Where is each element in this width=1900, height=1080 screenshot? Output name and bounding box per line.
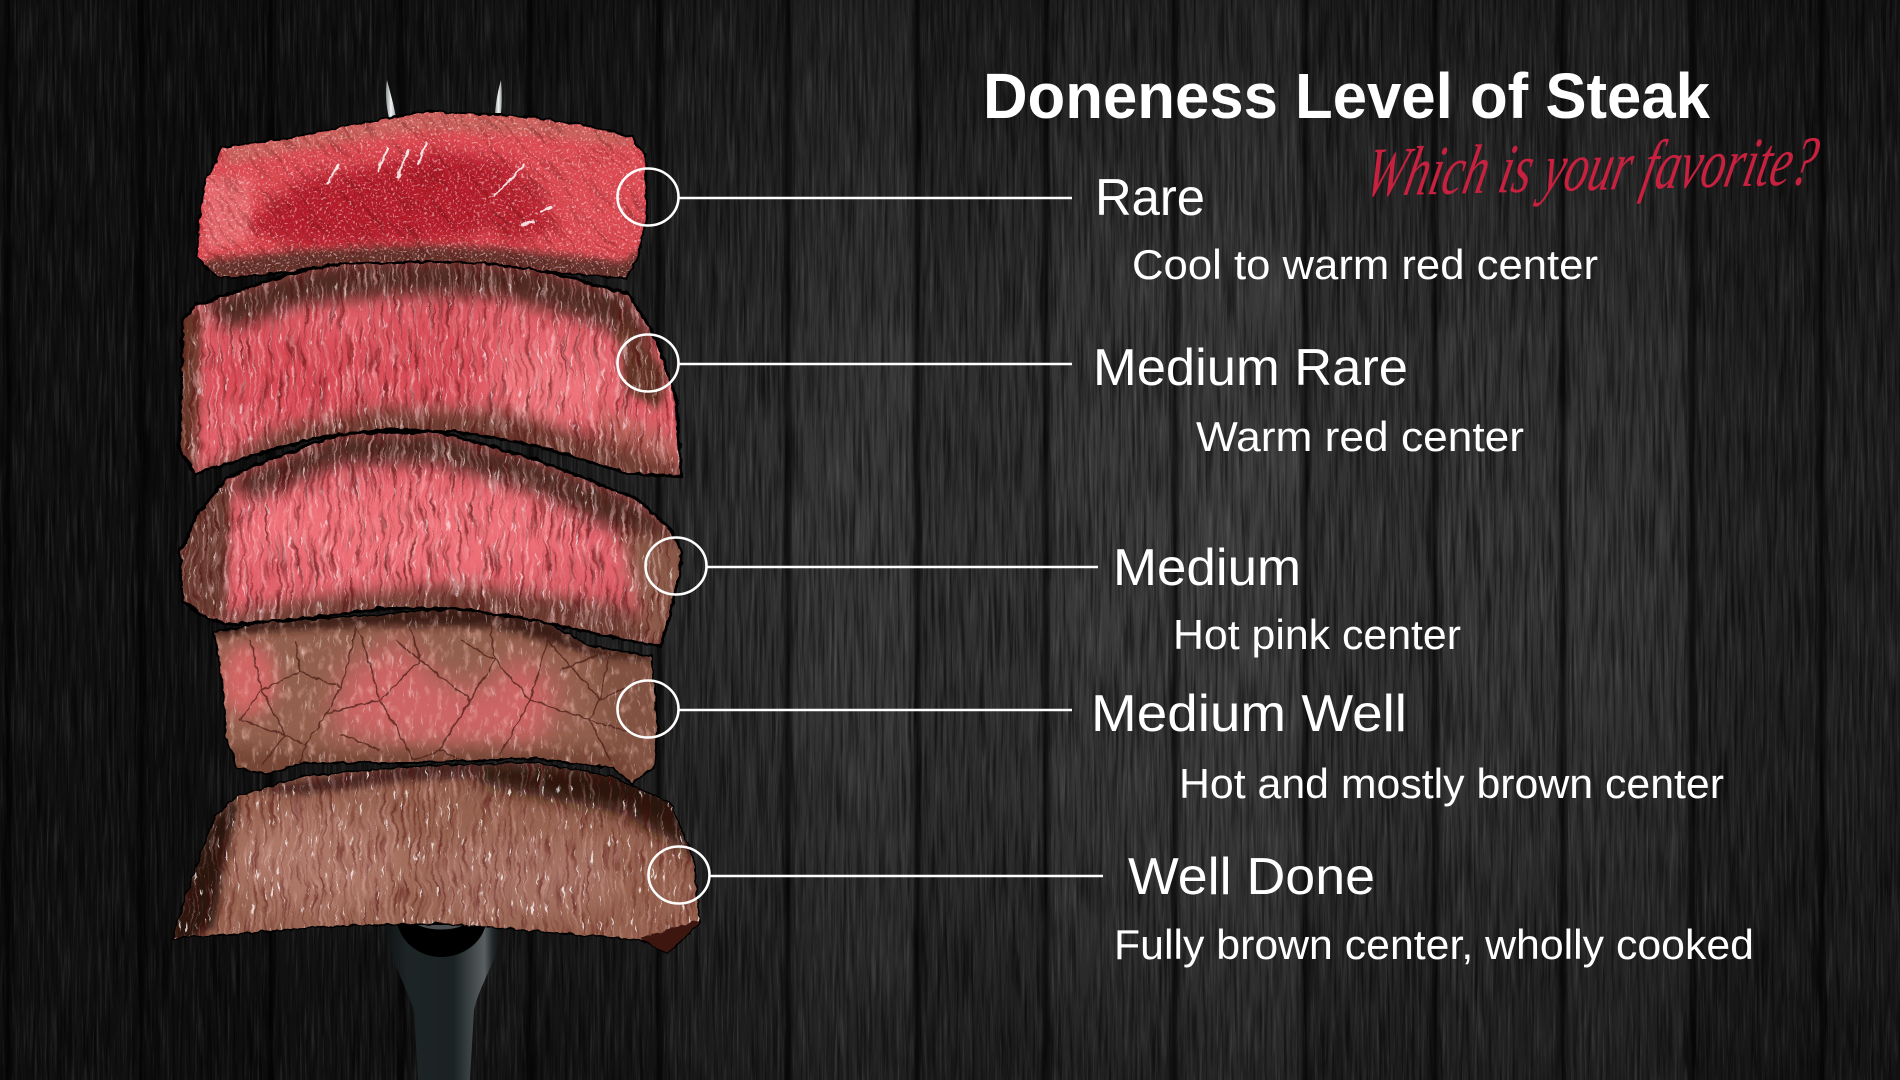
title: Doneness Level of Steak (983, 60, 1710, 132)
steak: medium (170, 425, 690, 660)
fork tines (386, 80, 502, 118)
label: medium rare: Medium Rare (1093, 339, 1408, 397)
description: well done: Fully brown center, wholly cooked (1114, 921, 1754, 968)
steak: medium well (212, 609, 660, 786)
callout: well done marker (648, 846, 1103, 904)
callout: medium rare marker (618, 334, 1072, 392)
fork handle (383, 915, 501, 1080)
label: medium well: Medium Well (1091, 685, 1407, 743)
steak: medium rare (170, 255, 690, 485)
description: medium well: Hot and mostly brown center (1179, 760, 1724, 807)
steak: well done (165, 755, 720, 960)
description: medium: Hot pink center (1173, 611, 1461, 658)
label: rare: Rare (1095, 169, 1205, 227)
callout: medium well marker (618, 680, 1072, 738)
callout: rare marker (618, 168, 1072, 226)
label: medium: Medium (1113, 539, 1301, 597)
description: medium rare: Warm red center (1196, 413, 1524, 460)
steak: rare (196, 109, 648, 280)
callout: medium marker (646, 538, 1098, 594)
steak stack on fork (12, 0, 829, 1080)
description: rare: Cool to warm red center (1132, 241, 1598, 288)
label: well done: Well Done (1128, 848, 1375, 906)
